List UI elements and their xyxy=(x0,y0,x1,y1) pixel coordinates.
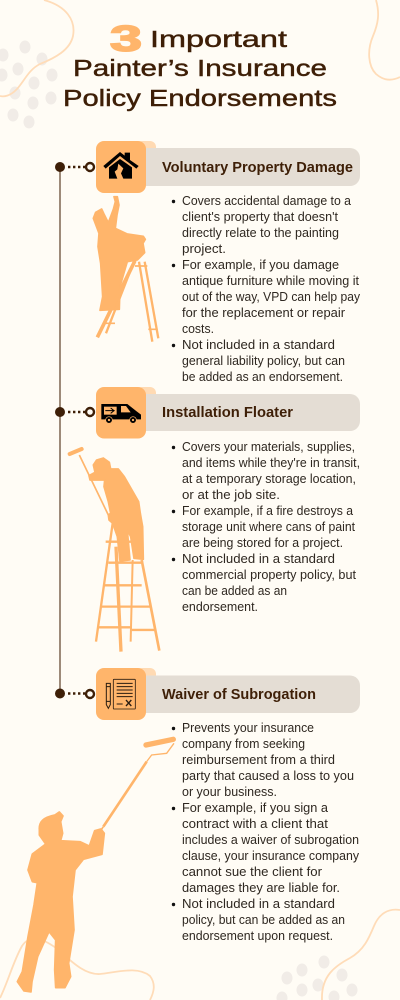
bullets text: Not included in a standard xyxy=(182,551,335,566)
bullets text: clause, your insurance company xyxy=(182,848,359,863)
bullets text: and items while they're in transit, xyxy=(182,455,360,470)
bullets text: client's property that doesn't xyxy=(182,209,338,224)
bullets text xyxy=(172,439,360,614)
bullets text: antique furniture while moving it xyxy=(182,273,359,288)
heading: Voluntary Property Damage xyxy=(162,159,353,176)
bullets text: costs. xyxy=(182,321,214,336)
panel: voluntary property damage xyxy=(93,141,360,384)
timeline xyxy=(55,162,94,698)
bullets text: endorsement upon request. xyxy=(182,928,333,943)
panel: waiver of subrogation xyxy=(17,668,360,992)
bullets text: Prevents your insurance xyxy=(182,720,314,735)
illustration: painter with long roller xyxy=(17,739,174,992)
bullets text: For example, if a fire destroys a xyxy=(182,503,354,518)
title xyxy=(63,18,337,111)
title line 1: Important xyxy=(150,26,288,52)
bullets text: can be added as an xyxy=(182,583,287,598)
bullets text: storage unit where cans of paint xyxy=(182,519,355,534)
bullets text xyxy=(172,720,359,943)
bullets text: cannot sue the client for xyxy=(182,864,323,879)
bullets text: project. xyxy=(182,241,226,256)
dots: bottom right xyxy=(276,956,358,1000)
bullets text: at a temporary storage location, xyxy=(182,471,356,486)
bullets text xyxy=(172,193,360,384)
heading: Waiver of Subrogation xyxy=(162,686,316,703)
bullets text: endorsement. xyxy=(182,599,258,614)
bullets text: includes a waiver of subrogation xyxy=(182,832,359,847)
bullets text: or at the job site. xyxy=(182,487,280,502)
bullets text: be added as an endorsement. xyxy=(182,369,343,384)
bullets text: out of the way, VPD can help pay xyxy=(182,289,360,304)
bullets text: contract with a client that xyxy=(182,816,328,831)
bullets text: directly relate to the painting xyxy=(182,225,339,240)
bullets text: reimbursement from a third xyxy=(182,752,335,767)
illustration: painter with roller on ladder xyxy=(70,449,159,652)
bullets text: are being stored for a project. xyxy=(182,535,343,550)
bullets text: For example, if you damage xyxy=(182,257,339,272)
node 2 xyxy=(55,407,94,417)
node 1 xyxy=(55,162,94,172)
vertical line xyxy=(59,167,61,693)
bullets text: party that caused a loss to you xyxy=(182,768,354,783)
bullets text: Not included in a standard xyxy=(182,896,335,911)
bullet dots xyxy=(172,446,175,561)
panel: installation floater xyxy=(70,387,360,652)
bullets text: general liability policy, but can xyxy=(182,353,345,368)
bullets text: Covers accidental damage to a xyxy=(182,193,352,208)
header tab xyxy=(96,668,360,720)
bullets text: Covers your materials, supplies, xyxy=(182,439,355,454)
icon: van xyxy=(101,404,141,423)
bullets text: company from seeking xyxy=(182,736,305,751)
bullet dots xyxy=(172,727,175,906)
bullets text: Not included in a standard xyxy=(182,337,335,352)
icon: house xyxy=(103,152,139,179)
bullets text: for the replacement or repair xyxy=(182,305,346,320)
node 3 xyxy=(55,688,94,698)
bullets text: or your business. xyxy=(182,784,277,799)
bullets text: For example, if you sign a xyxy=(182,800,329,815)
icon: document and pen xyxy=(106,679,135,709)
title line 2: Painter’s Insurance xyxy=(73,55,327,81)
bullets text: commercial property policy, but xyxy=(182,567,356,582)
title line 3: Policy Endorsements xyxy=(63,85,337,111)
illustration: painter on ladder xyxy=(93,197,158,342)
heading: Installation Floater xyxy=(162,404,293,421)
title numeral: 3 xyxy=(110,18,142,59)
bullets text: damages they are liable for. xyxy=(182,880,340,895)
bullet dots xyxy=(172,200,175,347)
bullets text: policy, but can be added as an xyxy=(182,912,345,927)
dots: top left xyxy=(0,40,58,128)
header tab xyxy=(96,387,360,438)
header tab xyxy=(96,141,360,193)
